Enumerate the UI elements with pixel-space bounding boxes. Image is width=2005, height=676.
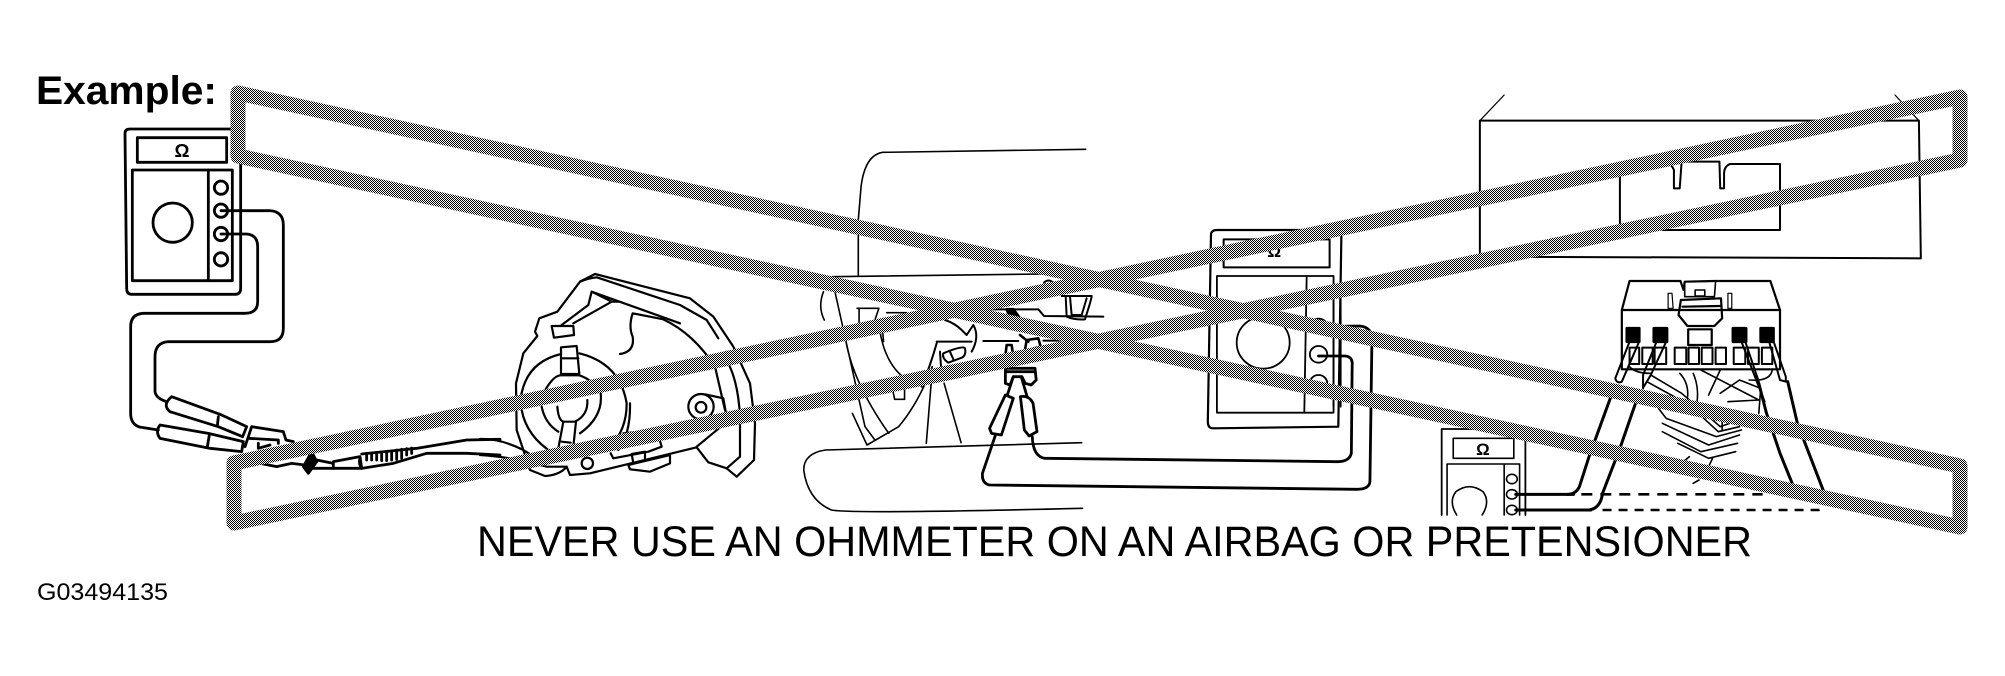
dash clip bracket — [987, 280, 1103, 319]
middle meter wires — [982, 326, 1372, 489]
connector housing — [1622, 281, 1780, 369]
prohibition cross: first bar — [238, 93, 1960, 527]
meter wires — [131, 211, 283, 430]
test probes — [157, 397, 247, 452]
mounting tab and clips — [628, 394, 726, 472]
middle ohmmeter — [1208, 230, 1341, 428]
test leads — [1568, 342, 1824, 510]
meter symbol: Ω — [1267, 242, 1281, 261]
ohmmeter body — [125, 129, 241, 294]
panel: dash clip, hand and connector detail — [922, 280, 1103, 387]
panel: clock spring airbag assembly — [480, 274, 755, 477]
right ohmmeter — [1442, 429, 1525, 515]
meter symbol: Ω — [1476, 440, 1490, 459]
dashboard outline — [804, 149, 1086, 512]
heading: Example: Example: — [36, 69, 217, 113]
connector and probes — [990, 368, 1037, 436]
panel: left meter and probes — [125, 129, 500, 473]
hand and bracket — [922, 320, 1060, 387]
airbag connector and cable — [245, 427, 500, 473]
figure code: G03494135 — [37, 579, 168, 606]
warning caption: NEVER USE AN OHMMETER ON AN AIRBAG OR PRETENSIONER — [477, 518, 1752, 566]
meter leads — [1516, 494, 1824, 510]
panel: vehicle interior with middle meter — [804, 149, 1372, 512]
prohibition cross: second bar — [234, 97, 1960, 523]
clock spring rings — [520, 346, 662, 469]
wiring harness — [1630, 367, 1772, 483]
panel: airbag connector with right meter — [1442, 95, 1921, 515]
meter symbol: Ω — [175, 140, 190, 161]
module box — [1480, 95, 1921, 258]
outer housing — [480, 274, 755, 477]
